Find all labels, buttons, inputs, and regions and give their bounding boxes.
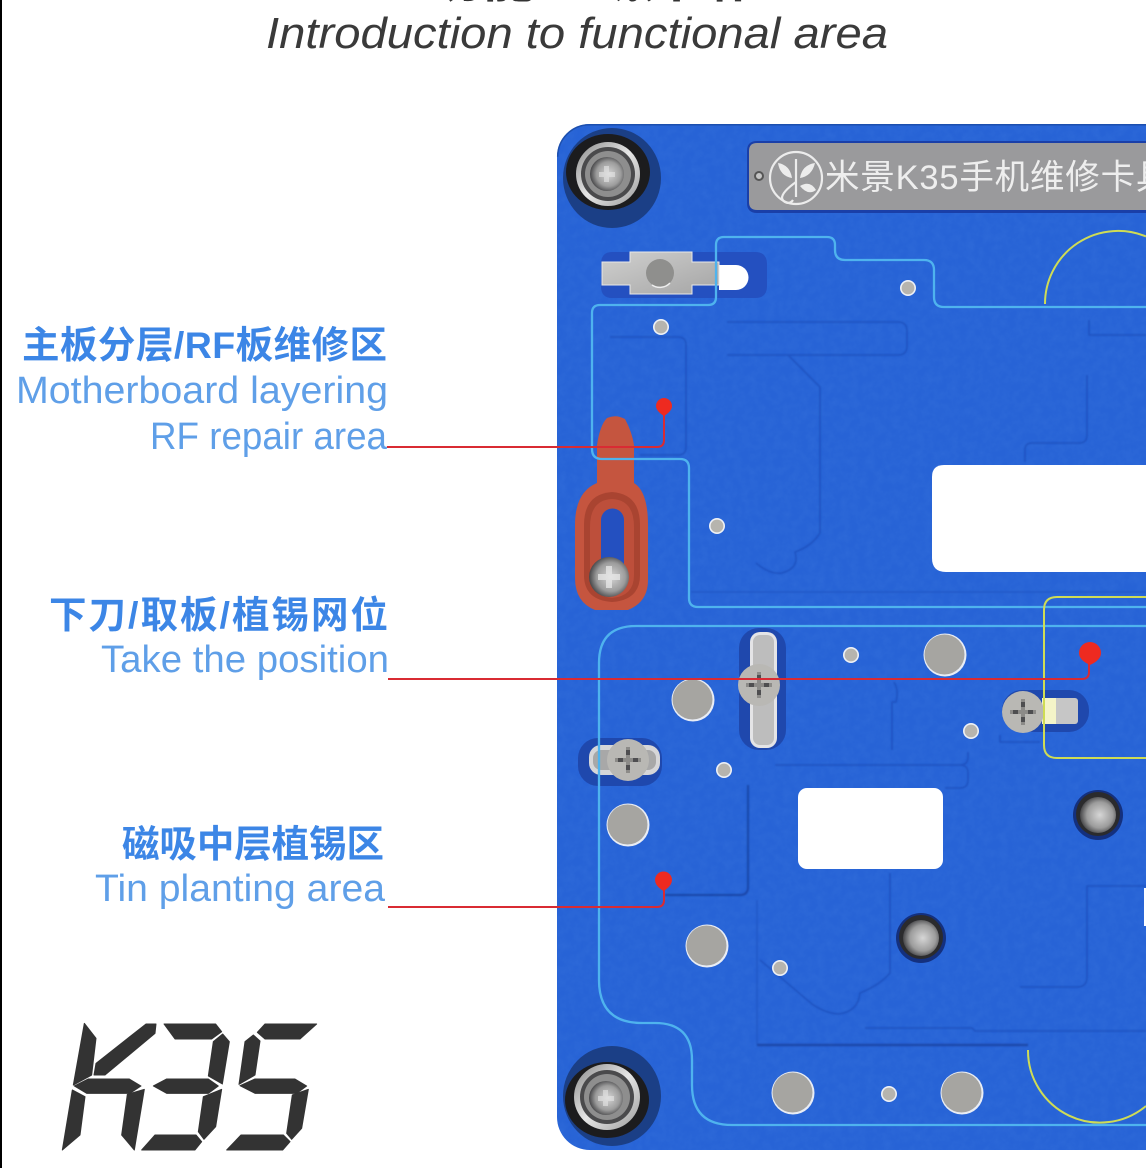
screw: bottom left corner — [563, 1046, 661, 1146]
callout: take the position: Take the position — [101, 639, 389, 681]
title: Introduction to functional area — [266, 9, 888, 58]
icon: logo — [770, 152, 822, 204]
board plate — [557, 124, 1146, 1150]
screw: top left corner — [563, 128, 661, 228]
red lever clamp — [575, 416, 648, 610]
K35 seven-segment logo — [62, 1023, 317, 1150]
horizontal slider screw: right — [1002, 690, 1089, 733]
nameplate — [747, 141, 1146, 213]
callout: tin planting area — [95, 823, 672, 910]
callout: tin planting area: 磁吸中层植锡区 — [122, 823, 384, 865]
callout: motherboard layering: Motherboard layering — [16, 370, 388, 412]
panel: repair fixture board — [557, 124, 1146, 1150]
callout: motherboard layering: 主板分层/RF板维修区 — [22, 324, 387, 366]
callout: motherboard layering — [16, 324, 672, 458]
sliding clip: top — [601, 252, 767, 298]
outline: cyan functional areas — [592, 237, 1146, 1125]
silver alignment pins — [653, 280, 979, 1102]
vertical slider screw — [738, 628, 786, 750]
callout: tin planting area: Tin planting area — [95, 868, 386, 910]
callout: take the position: 下刀/取板/植锡网位 — [49, 594, 388, 636]
callout: take the position — [49, 594, 1101, 681]
horizontal slider screw: left — [578, 738, 662, 786]
callout: motherboard layering: RF repair area — [150, 416, 388, 458]
round magnets — [606, 634, 984, 1114]
white cut-outs — [798, 465, 1146, 926]
outline: yellow functional areas — [1028, 231, 1146, 1123]
recessed screws — [896, 790, 1123, 963]
recessed board outlines — [610, 320, 1146, 1045]
